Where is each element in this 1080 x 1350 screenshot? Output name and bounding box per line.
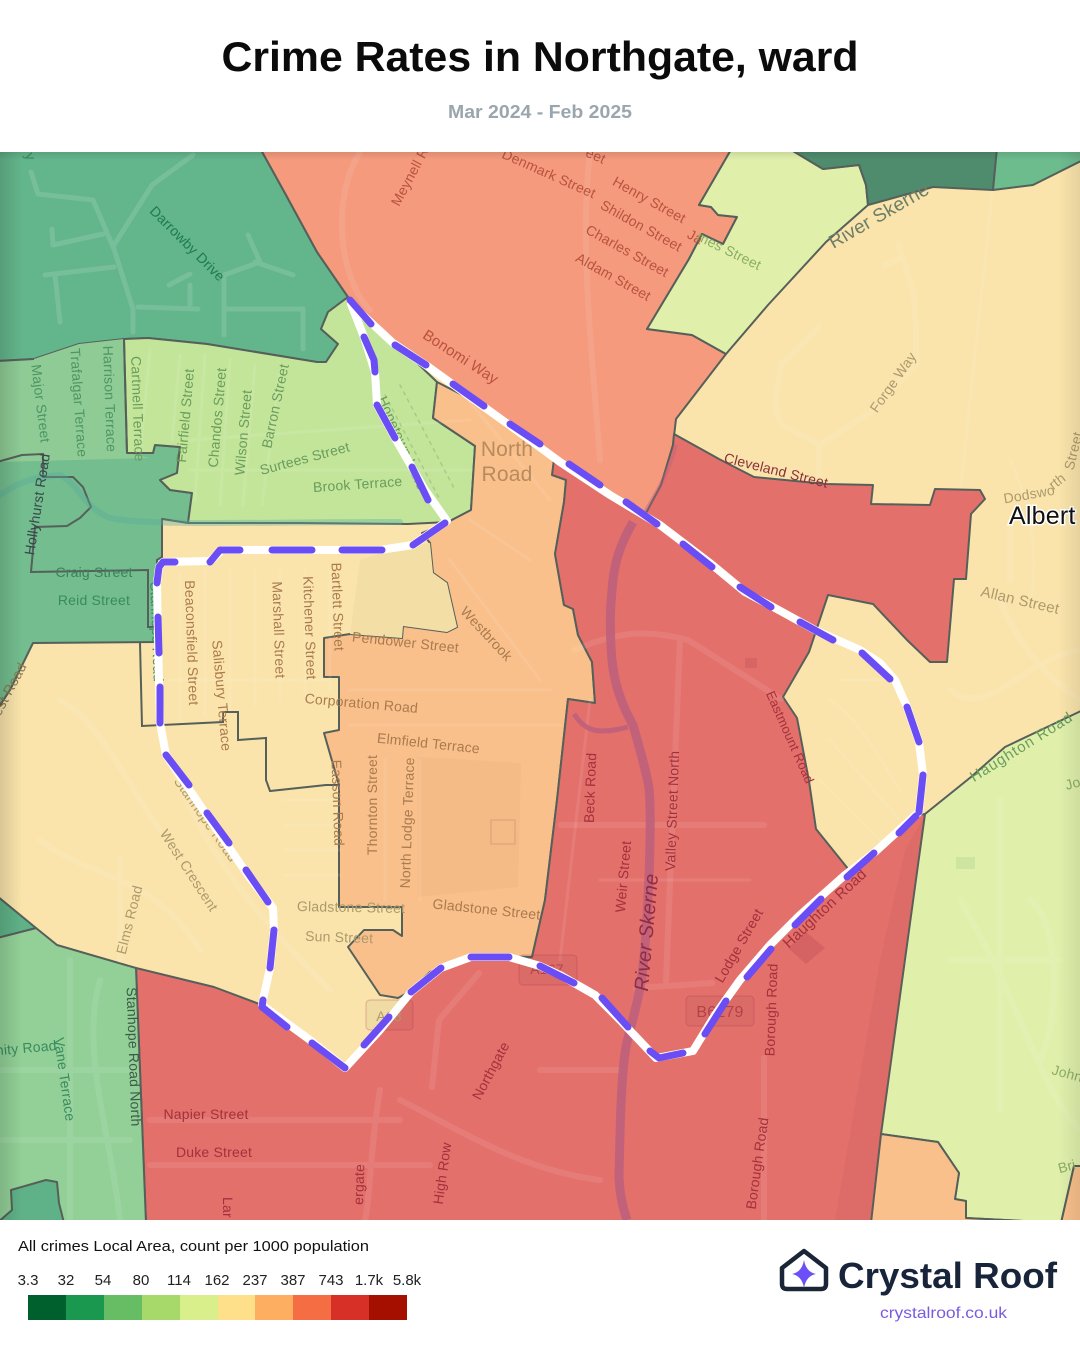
street labels: Brook Terrace <box>312 473 403 495</box>
street labels: Cleveland Street <box>723 449 830 491</box>
legend values: 32 <box>58 1272 74 1289</box>
street labels: Stanhope Road <box>171 774 241 865</box>
road shields <box>366 955 754 1030</box>
street labels: Bartlett Street <box>328 562 348 651</box>
street labels: Kitchener Street <box>300 576 320 680</box>
area: Surtees light green <box>124 297 475 524</box>
street labels: Marshall Street <box>269 581 289 679</box>
legend <box>18 1238 422 1320</box>
street labels: Craig Street <box>55 564 133 580</box>
street labels: Stanhope Road <box>147 582 167 682</box>
street labels: rth <box>1045 470 1069 493</box>
street labels: Henry Street <box>610 173 689 226</box>
street labels: Lodge Street <box>711 906 766 985</box>
street labels: Charles Street <box>583 221 672 280</box>
icon: house with star <box>782 1251 826 1289</box>
choropleth areas <box>0 148 1080 1223</box>
street labels: Gladstone Street <box>297 898 405 916</box>
legend values: 387 <box>280 1272 306 1289</box>
legend values: 237 <box>242 1272 268 1289</box>
street labels: Hopetown Lane <box>375 394 430 492</box>
street labels: Westbrook <box>457 603 516 665</box>
street labels: Napier Street <box>163 1106 249 1122</box>
street labels: Elms Road <box>113 884 145 956</box>
street labels: Dodswo <box>1002 482 1056 506</box>
street labels: Barron Street <box>258 362 292 450</box>
street labels: High Row <box>430 1141 454 1205</box>
street labels: Beck Road <box>581 752 599 823</box>
label: River Skerne south: River Skerne <box>631 873 663 992</box>
legend values: 80 <box>133 1272 149 1289</box>
river Skerne <box>574 445 676 1220</box>
street labels: Forge Way <box>866 349 919 415</box>
area: corner orange <box>1061 1166 1080 1223</box>
label: River Skerne north: River Skerne <box>825 179 933 253</box>
area: top dark green <box>788 148 997 205</box>
area: Haughton pale green <box>881 710 1080 1223</box>
street labels <box>0 144 1080 1218</box>
area: small dark green west <box>0 896 36 938</box>
brand name: Crystal Roof <box>838 1255 1058 1296</box>
area: south-east orange <box>871 1134 1061 1223</box>
street labels: Wilson Street <box>231 389 255 476</box>
street labels: Chandos Street <box>205 367 229 468</box>
street labels: Elmfield Terrace <box>376 730 481 756</box>
street labels: A167 <box>530 961 564 977</box>
street labels: Meynell R <box>388 144 432 208</box>
street labels: Corporation Road <box>304 690 419 716</box>
legend values: 5.8k <box>393 1272 422 1289</box>
street labels: Haughton Road <box>780 866 870 952</box>
street labels: Cartmell Terrace <box>128 356 148 462</box>
label: Bonomi Way: Bonomi Way <box>420 327 502 388</box>
street labels: Valley Street North <box>662 750 682 871</box>
street labels: Weir Street <box>612 840 634 913</box>
area: Major Street green <box>0 339 150 462</box>
street labels: Denmark Street <box>500 146 598 201</box>
street labels: ergate <box>350 1164 367 1205</box>
street labels: Hollyhurst Road <box>21 452 53 556</box>
area: top right green <box>993 148 1080 190</box>
street labels: Ja <box>685 226 706 247</box>
area: northern salmon <box>260 148 737 515</box>
street labels: eet <box>583 144 608 167</box>
internal ward boundaries <box>0 339 339 791</box>
area: west mid green <box>0 445 192 710</box>
legend colour scale <box>28 1295 407 1320</box>
area: north-east pale green <box>647 148 868 354</box>
subtitle: date range: Mar 2024 - Feb 2025 <box>448 102 632 122</box>
map panel <box>0 144 1080 1220</box>
street labels: Harrison Terrace <box>100 345 120 452</box>
street labels: Stanhope Road North <box>124 987 144 1127</box>
area: North Road orange <box>324 382 595 998</box>
legend values: 162 <box>204 1272 230 1289</box>
ward boundary: Northgate <box>157 300 923 1068</box>
street labels: Reid Street <box>58 592 130 608</box>
area: small dark green south <box>0 1180 64 1223</box>
legend values: 743 <box>318 1272 344 1289</box>
street labels: Surtees Street <box>258 438 351 478</box>
street labels: Gladstone Street <box>432 895 541 923</box>
legend title: All crimes Local Area, count per 1000 population <box>18 1238 369 1255</box>
legend values: 1.7k <box>355 1272 384 1289</box>
brand logo <box>782 1251 1058 1322</box>
area: central red <box>136 434 985 1223</box>
street labels: Shildon Street <box>598 197 685 255</box>
street labels: Trafalgar Terrace <box>67 348 91 458</box>
street labels: Salisbury Terrace <box>209 639 235 752</box>
map tone details <box>350 543 975 1220</box>
area: Darrowby green <box>0 148 348 362</box>
street labels: Aldam Street <box>573 249 654 304</box>
street labels: Allan Street <box>979 583 1061 618</box>
street labels: Duke Street <box>176 1144 252 1160</box>
street labels: mes Street <box>694 228 764 273</box>
brand url: crystalroof.co.uk <box>880 1305 1008 1322</box>
street labels: Borough Road <box>743 1116 771 1210</box>
street labels: Pendower Street <box>351 628 460 656</box>
street labels: B6279 <box>696 1004 744 1021</box>
street labels: Easson Road <box>328 759 347 846</box>
street labels: Bri <box>1056 1156 1077 1176</box>
street labels: Eastmount Road <box>763 689 817 786</box>
legend values: 3.3 <box>18 1272 38 1289</box>
label: North Road: North <box>481 438 533 461</box>
road network <box>0 152 1080 1220</box>
legend values: 54 <box>95 1272 111 1289</box>
legend values <box>18 1272 422 1289</box>
title: Crime Rates in Northgate, ward <box>222 33 858 80</box>
street labels: Northgate <box>469 1039 513 1102</box>
legend values: 114 <box>167 1272 191 1289</box>
street labels: Fairfield Street <box>173 368 197 463</box>
street labels: North Lodge Terrace <box>397 757 417 889</box>
street labels: Vane Terrace <box>51 1036 79 1122</box>
street labels: Sun Street <box>305 928 374 946</box>
label: Albert: Albert <box>1009 502 1076 530</box>
street labels: West Crescent <box>157 826 222 914</box>
label: Darrowby Drive: Darrowby Drive <box>147 203 228 284</box>
street labels: Haughton Road <box>967 709 1076 786</box>
street labels: Borough Road <box>761 963 781 1056</box>
street labels: Major Street <box>28 363 54 443</box>
map edge shading <box>0 152 1080 1220</box>
area: south-west green <box>0 928 146 1223</box>
street labels: Beaconsfield Street <box>182 580 202 706</box>
street labels: y <box>22 150 39 162</box>
street labels: Lar <box>220 1197 236 1218</box>
street labels: A68 <box>376 1008 402 1024</box>
street labels: Road <box>481 463 533 486</box>
street labels: Thornton Street <box>364 755 380 855</box>
